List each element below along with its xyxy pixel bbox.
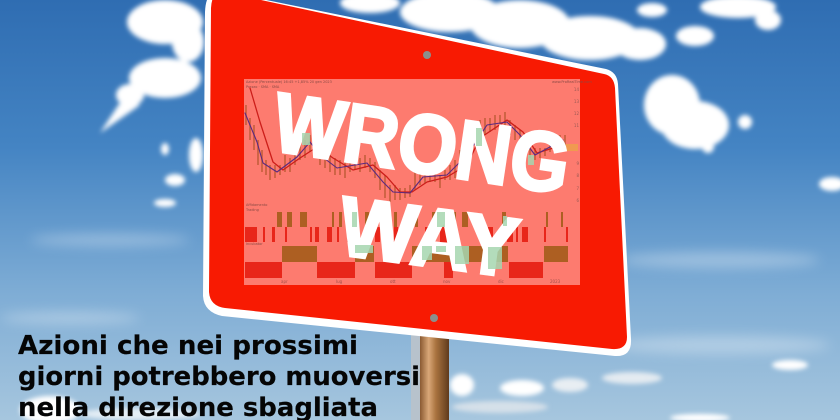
- price scale: 11: [574, 123, 579, 128]
- candlesticks: [246, 105, 565, 202]
- price scale: [574, 87, 579, 203]
- chart header text: Azione (Percentuale) 16:45 +1,85% 20 gen 2023: [246, 80, 332, 84]
- sign pole: [411, 330, 449, 420]
- price scale: 13: [574, 99, 579, 104]
- chart header text: Incubator: [246, 242, 263, 246]
- date axis: apr: [281, 279, 288, 284]
- title text: Azioni che nei prossimi: [18, 331, 358, 361]
- sign white border: [203, 0, 631, 356]
- sign red face: [209, 0, 627, 349]
- price scale: 8: [576, 173, 579, 178]
- title text: giorni potrebbero muoversi: [18, 362, 420, 392]
- price scale: 12: [574, 111, 579, 116]
- chart header text: www.ProRealTime.com: [552, 80, 592, 84]
- title text: [18, 331, 420, 420]
- date axis: 2023: [550, 279, 561, 284]
- stock chart panel: [244, 79, 592, 285]
- chart header text: Trading: [245, 208, 259, 212]
- price tag: [565, 144, 578, 151]
- indicator panel bars: [245, 212, 568, 278]
- WAY lettering: WAY: [334, 179, 524, 295]
- date axis: ott: [390, 279, 396, 284]
- chart showing through letters: [302, 128, 534, 269]
- price scale: 7: [576, 186, 579, 191]
- chart header text: Prezzo · SMA · SMA: [246, 85, 280, 89]
- rivets: [423, 51, 438, 322]
- chart header text: [245, 80, 592, 246]
- price scale: 9: [576, 161, 579, 166]
- WRONG lettering: WRONG: [267, 75, 576, 212]
- date axis: [281, 279, 561, 284]
- date axis: dic: [498, 279, 504, 284]
- chart header text: Affidamento: [246, 203, 267, 207]
- price scale: 6: [576, 198, 579, 203]
- price scale: 14: [574, 87, 579, 92]
- date axis: lug: [336, 279, 343, 284]
- moving average lines: [245, 88, 563, 193]
- road sign: [203, 0, 631, 356]
- date axis: nov: [443, 279, 451, 284]
